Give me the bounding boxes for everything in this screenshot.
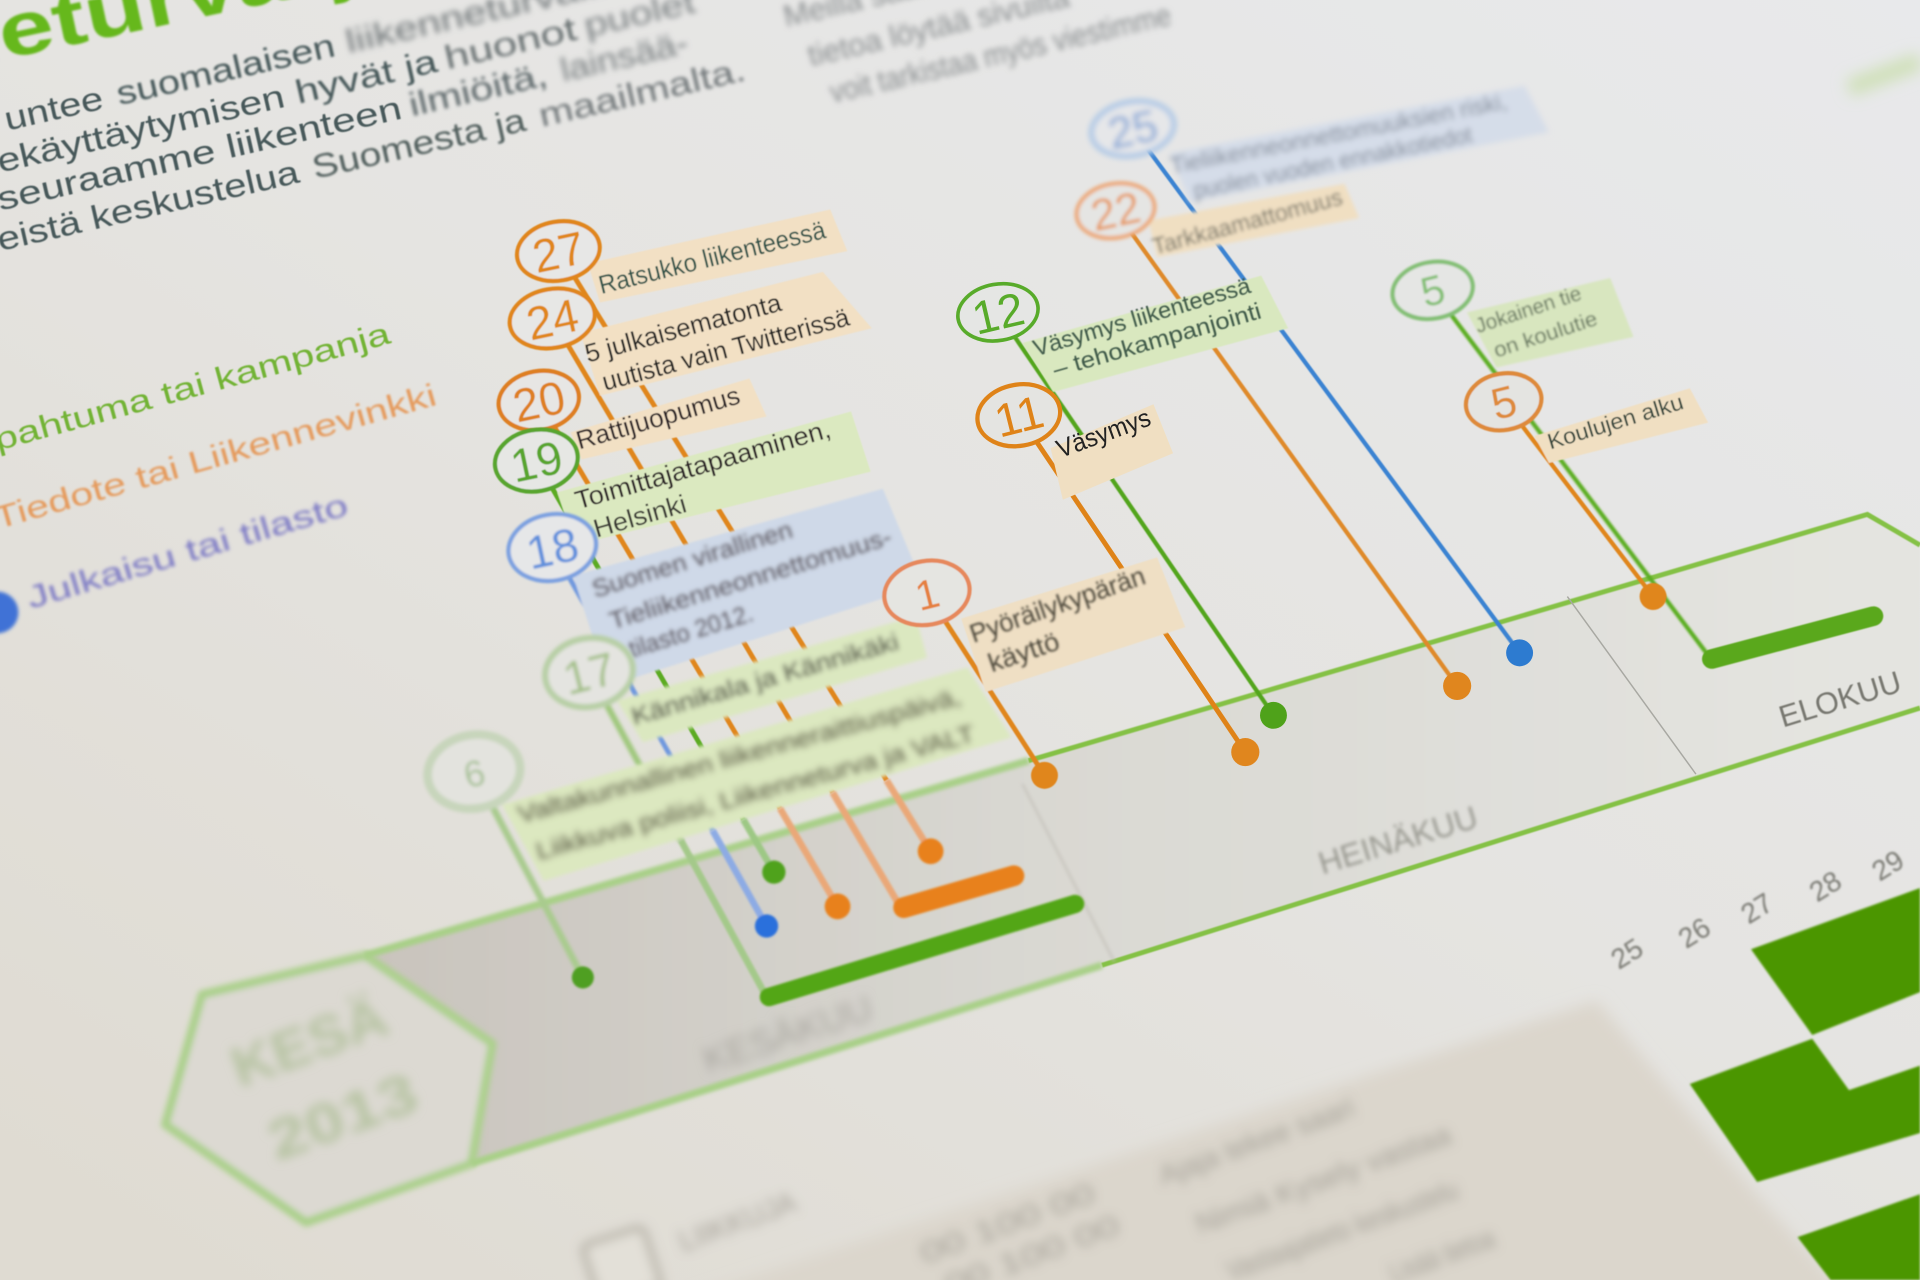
elokuu green period bar [1712, 616, 1873, 659]
blurred calendar key and listing [582, 1091, 1500, 1280]
event 22: tarkkaamattomuus: Tarkkaamattomuus [1149, 184, 1345, 260]
blurred calendar key and listing: 00 100 00 [916, 1177, 1099, 1271]
event 6: liikenneraittiuspäivä: 6 [460, 751, 489, 796]
event 25: blue line and label: Tieliikenneonnettomuuksien riski, [1168, 88, 1509, 179]
legend: Tiedote tai Liikennevinkki [0, 377, 440, 536]
event 19: toimittajatapaaminen: Helsinki [590, 490, 690, 543]
bottom calendar panel tint [686, 1001, 1849, 1280]
event 1: pyöräilykypärän käyttö: käyttö [985, 628, 1063, 678]
blurred calendar key and listing: Ajaja tekee saari [1154, 1091, 1359, 1192]
event 18: tilasto: Tieliikenneonnettomuus- [606, 524, 895, 635]
event 6: liikenneraittiuspäivä: Liikkuva poliisi, Liikenneturva ja VALT [533, 721, 978, 866]
lower connector lines and date dots [572, 780, 943, 995]
timeline band [165, 514, 1920, 1222]
hexagon season label [223, 984, 426, 1172]
calendar heatmap day numbers: 27 [1735, 887, 1778, 930]
event 22: tarkkaamattomuus: 22 [1087, 183, 1145, 241]
orange period bar [904, 876, 1014, 908]
intro text block left: huonot [441, 11, 580, 77]
event 24: twitter: 5 julkaisematonta [582, 289, 785, 368]
legend: Julkaisu tai tilasto [22, 486, 352, 615]
event 18: tilasto [503, 489, 923, 830]
event 25: blue line and label [1087, 86, 1549, 666]
event 27: ratsukko liikenteessä: 27 [528, 221, 589, 283]
event 11: väsymys: 11 [989, 385, 1049, 447]
event 12: väsymys liikenteessä [953, 272, 1288, 729]
intro text block left: hyvät ja [292, 43, 442, 112]
event 19: toimittajatapaaminen: 19 [506, 431, 567, 492]
event 20: rattijuopumus [494, 365, 780, 808]
intro text block left: lainsää- [557, 24, 692, 89]
intro text block left: Suomesta ja [309, 102, 530, 187]
event 6: liikenneraittiuspäivä [422, 668, 1011, 977]
event 5 green: jokainen tie: on koulutie [1491, 307, 1600, 362]
event 17: kännikala [540, 616, 927, 840]
event 19: toimittajatapaaminen [490, 412, 871, 819]
faint green page edge top right [1849, 61, 1920, 88]
event 24: twitter [505, 272, 872, 792]
event 5 orange: koulujen alku: Koulujen alku [1544, 389, 1686, 454]
intro text block left: liikenteen [223, 90, 405, 166]
event 5 orange: koulujen alku: 5 [1486, 376, 1522, 430]
event 1: pyöräilykypärän käyttö: 1 [910, 569, 944, 620]
event 18: tilasto: 18 [522, 518, 583, 579]
blurred calendar key and listing: Nimiä Kysely vastaa [1191, 1118, 1456, 1241]
intro text block left [0, 0, 749, 259]
event 11: väsymys [972, 378, 1259, 766]
calendar heatmap day numbers: 25 [1606, 932, 1649, 975]
intro text block left: ekäyttäytymisen [0, 78, 288, 181]
event 27: ratsukko liikenteessä [512, 209, 887, 780]
blurred calendar key and listing: LIIKKUJA [674, 1185, 801, 1258]
calendar heatmap day numbers: 26 [1673, 911, 1716, 954]
event 5 green: jokainen tie: 5 [1416, 265, 1450, 316]
intro text block left: suomalaisen [113, 27, 338, 113]
calendar heatmap green cells [1690, 888, 1920, 1280]
month label: heinäkuu: HEINÄKUU [1314, 799, 1482, 881]
green period bar [769, 904, 1075, 997]
event 27: ratsukko liikenteessä: Ratsukko liikenteessä [596, 216, 829, 300]
event 5 green: jokainen tie [1388, 256, 1708, 655]
event 25: blue line and label: 25 [1104, 101, 1162, 159]
event 22: tarkkaamattomuus [1072, 177, 1471, 700]
intro text block left: maailmalta. [535, 52, 749, 135]
calendar heatmap day numbers: 29 [1866, 844, 1909, 887]
intro text block left: untee [1, 80, 107, 138]
event 24: twitter: 24 [522, 289, 583, 350]
event 12: väsymys liikenteessä: – tehokampanjointi [1050, 298, 1264, 382]
event 20: rattijuopumus: Rattijuopumus [573, 382, 743, 455]
event 1: pyöräilykypärän käyttö: Pyöräilykypärän [966, 562, 1149, 649]
legend [0, 315, 440, 633]
event 17: kännikala: Kännikala ja Kännikäki [628, 629, 902, 731]
month label: elokuu: ELOKUU [1775, 665, 1905, 734]
calendar heatmap day numbers [1606, 844, 1909, 975]
intro text block left: eistä keskustelua [0, 154, 303, 259]
month label: kesäkuu: KESÄKUU [698, 987, 877, 1081]
event 5 green: jokainen tie: Jokainen tie [1472, 282, 1584, 338]
event 18: tilasto: tilasto 2012. [626, 600, 757, 663]
event 1: pyöräilykypärän käyttö [879, 554, 1185, 789]
event 17: kännikala: 17 [558, 642, 621, 705]
event 6: liikenneraittiuspäivä: Valtakunnallinen liikenneraittiuspäivä, [515, 684, 964, 829]
event 5 orange: koulujen alku [1461, 367, 1708, 610]
event 19: toimittajatapaaminen: Toimittajatapaaminen, [572, 415, 834, 515]
event 20: rattijuopumus: 20 [508, 371, 570, 432]
event 24: twitter: uutista vain Twitterissä [599, 303, 853, 397]
event 12: väsymys liikenteessä: 12 [967, 282, 1029, 345]
event 25: blue line and label: puolen vuoden ennakkotiedot [1191, 121, 1475, 203]
calendar heatmap day numbers: 28 [1804, 865, 1847, 908]
event 18: tilasto: Suomen virallinen [589, 517, 796, 603]
intro text block left: ilmiöitä, [405, 57, 551, 124]
hexagon season label: 2013 [259, 1060, 426, 1172]
event 11: väsymys: Väsymys [1053, 404, 1155, 464]
heading [0, 0, 409, 88]
hexagon season label: KESÄ [223, 984, 396, 1099]
event 12: väsymys liikenteessä: Väsymys liikenteessä [1030, 272, 1253, 361]
